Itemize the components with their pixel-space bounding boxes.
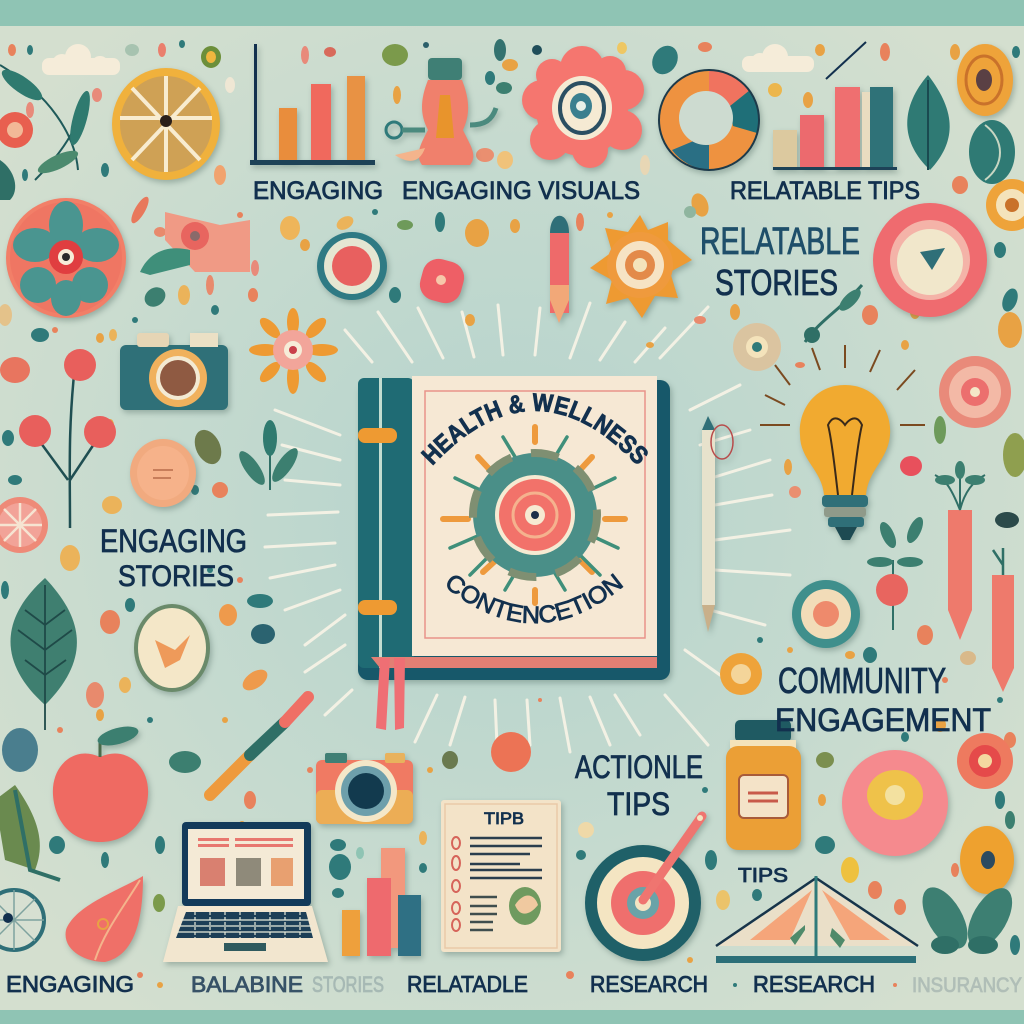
icon: berry branch: [19, 349, 116, 528]
icon: small sun: [733, 323, 781, 371]
icon: orange wheel: [112, 68, 220, 180]
icon: cloud right with pencil stroke: [742, 42, 866, 79]
icon: leafy branch top left: [0, 65, 94, 200]
document: TIPB checklist: TIPB: [484, 809, 524, 828]
icon: laptop: [163, 822, 328, 962]
bottom label: faded STOR: STORIES: [312, 972, 384, 997]
icon: pink flower: [522, 46, 644, 168]
icon: botanical leaf lower left: [0, 785, 60, 880]
heading: ENGAGING STORIES: ENGAGING: [100, 523, 247, 559]
icon: jar: [726, 720, 801, 850]
icon: orange ring: [720, 653, 762, 695]
bottom label: RESEARCH two: RESEARCH: [753, 971, 875, 997]
icon: big leaf left: [10, 578, 77, 730]
icon: bulb rays: [760, 345, 925, 425]
icon: roof tent: [716, 876, 918, 963]
icon: peach tag disc: [130, 439, 196, 507]
bar chart: top left: [250, 44, 375, 165]
heading: ACTIONLE TIPS: TIPS: [607, 786, 670, 822]
heading: ENGAGING STORIES: STORIES: [118, 560, 234, 593]
icon: tall leaf: [907, 75, 950, 170]
heading: COMMUNITY ENGAGEMENT: COMMUNITY: [778, 660, 946, 701]
icon: carrot pencil two: [992, 548, 1014, 692]
heading: COMMUNITY ENGAGEMENT: ENGAGEMENT: [775, 702, 991, 738]
top teal band: [0, 0, 1024, 26]
book: central notebook: [357, 376, 675, 730]
heading: ENGAGING: ENGAGING: [253, 177, 383, 205]
heading: ENGAGING STORIES: [100, 523, 247, 593]
heading: RELATABLE TIPS: RELATABLE TIPS: [730, 177, 920, 205]
bottom label: BALABINE: BALABINE: [191, 972, 303, 997]
icon: ringed target badge: [317, 232, 387, 300]
ribbon bookmark: [376, 658, 405, 730]
bottom teal band: [0, 1010, 1024, 1024]
bar chart: top right: [773, 87, 897, 170]
icon: teal ring badge: [792, 580, 860, 648]
icon: pink disc with emblem: [842, 750, 948, 856]
icon: orange ring bottom right: [960, 826, 1014, 894]
curved title: HEALTH & WELLNESS: [420, 392, 648, 466]
bottom label: RELATABLE: RELATADLE: [407, 971, 528, 997]
icon: pink blob: [416, 255, 468, 307]
bottom label: RESEARCH one: RESEARCH: [590, 971, 708, 997]
icon: target with pencil: [585, 815, 703, 961]
icon: bottle figure: [386, 58, 496, 165]
heading: RELATABLE STORIES: [700, 221, 860, 303]
donut chart: [659, 70, 759, 170]
icon: berry sprig: [867, 515, 926, 630]
heading: ACTIONLE TIPS: [575, 749, 703, 822]
icon: leaf sprig right: [804, 285, 864, 343]
icon: pink meat leaf: [66, 876, 143, 962]
icon: carrot pencil one: [935, 461, 985, 640]
icon: pink swirl badge: [939, 356, 1011, 428]
icon: flower disc: [6, 198, 126, 318]
heading: ACTIONLE TIPS: ACTIONLE: [575, 749, 703, 785]
icon: sun badge: [590, 215, 692, 318]
strap bottom: [358, 600, 397, 615]
icon: diagonal pen: [210, 697, 308, 795]
icon: vertical pen: [550, 216, 569, 323]
icon: cream floral disc: [134, 604, 210, 692]
icon: camera left: [120, 333, 228, 410]
icon: red flower right: [957, 733, 1013, 789]
icon: citrus slice: [0, 497, 48, 553]
label: small TIPS: TIPS: [738, 865, 788, 887]
icon: camera bottom: [316, 753, 413, 824]
radiating rays around book: [265, 303, 790, 752]
heading: RELATABLE STORIES: RELATABLE: [700, 221, 860, 263]
icon: coral blob: [491, 732, 531, 772]
icon: light bulb: [800, 385, 890, 540]
page block edge: [371, 657, 657, 668]
icon: apple: [53, 723, 148, 842]
icon: cloud left: [42, 44, 120, 75]
curved subtitle: CONTENCETION: [447, 573, 624, 624]
bottom label: ENGAGING: ENGAGING: [6, 971, 134, 997]
back cover: [358, 380, 670, 680]
heading: ENGAGING VISUALS: ENGAGING VISUALS: [402, 177, 640, 205]
document: TIPB checklist: [441, 800, 561, 952]
burst emblem: [443, 427, 625, 603]
icon: wheel: [0, 890, 44, 950]
strap top: [358, 428, 397, 443]
heading: RELATABLE STORIES: STORIES: [715, 262, 838, 303]
icon: orange disc right edge: [986, 179, 1024, 231]
icon: double leaves bottom right: [913, 880, 1021, 956]
icon: heart disc: [873, 203, 987, 317]
icon: pink camera swatch: [140, 212, 250, 275]
cover page: [412, 376, 657, 656]
icon: sun flower left: [249, 308, 338, 394]
heading: COMMUNITY ENGAGEMENT: [775, 660, 991, 738]
decorative page frame: [425, 391, 645, 638]
bar chart: bottom: [342, 848, 421, 956]
icon: tall pencil right of book: [702, 416, 733, 632]
spine: [358, 378, 414, 668]
icon: leaf sprig centre left: [235, 420, 302, 490]
icon: teal leaf badge: [969, 120, 1015, 184]
icon: orange ring badge: [957, 44, 1013, 116]
